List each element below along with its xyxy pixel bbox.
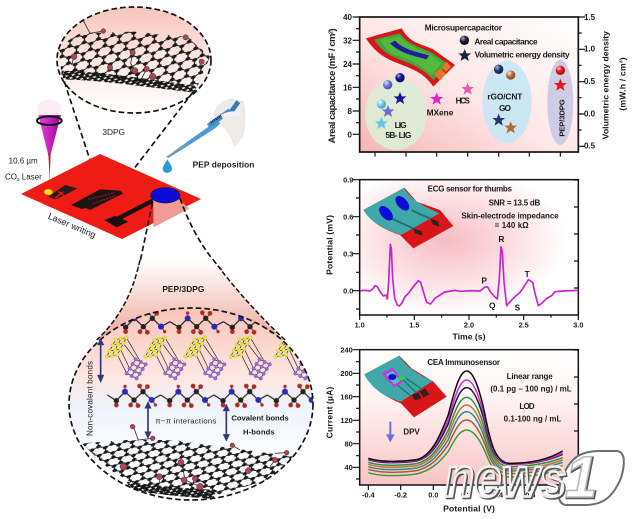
label: DPV: DPV bbox=[403, 427, 420, 436]
icon: PEP droplet bbox=[163, 159, 172, 173]
right axis numbers: 0.0 bbox=[584, 109, 596, 118]
chart: ECG sensor bbox=[325, 175, 583, 342]
left axis numbers: 24 bbox=[343, 60, 353, 69]
label: 10.6 um CO2 laser: Laser bbox=[20, 172, 42, 181]
right axis title: 3 bbox=[619, 60, 625, 63]
axis numbers: 0.6 bbox=[525, 491, 535, 500]
dashed zoom lines from electrode to bubble bbox=[64, 82, 193, 193]
material labels: HCS bbox=[456, 95, 470, 105]
y axis title: 2 bbox=[328, 31, 334, 34]
PQRST labels: R bbox=[498, 234, 504, 244]
logo oval bbox=[559, 451, 624, 505]
axis numbers: -0.4 bbox=[362, 491, 376, 500]
material labels: PEP/3DPG bbox=[557, 99, 566, 137]
ECG texts: Skin-electrode impedance bbox=[461, 211, 559, 220]
aromatic pi-stacks bbox=[105, 336, 316, 380]
label: 10.6 um CO2 laser: 2 bbox=[17, 177, 20, 182]
PEP chain top bbox=[117, 310, 277, 335]
PQRST labels: T bbox=[525, 269, 530, 279]
ECG waveform bbox=[360, 244, 578, 306]
zoom bubble: 3DPG graphene bbox=[57, 7, 211, 113]
right axis numbers: 1.5 bbox=[584, 13, 596, 22]
label: 10.6 um CO2 laser: 10.6 µm bbox=[9, 156, 38, 165]
label: 10.6 um CO2 laser bbox=[5, 156, 42, 182]
material labels: 5B- LIG bbox=[385, 130, 411, 140]
axis numbers: 2.5 bbox=[519, 321, 529, 330]
right axis numbers: 0.5 bbox=[584, 77, 596, 86]
molecular bubble bbox=[69, 308, 321, 500]
y axis title: ) bbox=[327, 28, 337, 31]
left axis numbers: 8 bbox=[348, 107, 353, 116]
ECG texts: SNR = 13.5 dB bbox=[489, 199, 541, 208]
funnel edges bbox=[97, 260, 285, 340]
CEA texts: 0.1-100 ng / mL bbox=[504, 415, 561, 424]
axis titles: Potential (mV) bbox=[325, 215, 335, 275]
axis numbers bbox=[340, 345, 568, 500]
icon: CO2 laser bbox=[37, 99, 62, 180]
frame and ticks bbox=[353, 17, 585, 157]
axis numbers: 0.2 bbox=[461, 491, 471, 500]
PQRST labels bbox=[481, 234, 530, 313]
left axis numbers: 40 bbox=[343, 13, 353, 22]
device icon bbox=[364, 356, 447, 417]
frame and ticks bbox=[353, 180, 578, 320]
dashed funnel upper part bbox=[138, 198, 222, 270]
label: pi-pi interactions: π−π interactions bbox=[155, 416, 217, 425]
label: PEP/3DPG: PEP/3DPG bbox=[162, 284, 204, 294]
frame and ticks bbox=[353, 350, 578, 490]
label: Non-covalent bonds: Non-covalent bonds bbox=[85, 361, 94, 436]
watermark: news1 logo bbox=[444, 445, 624, 511]
axis numbers: 0.8 bbox=[558, 491, 568, 500]
y axis title: Areal capacitance (mF / cm bbox=[327, 34, 337, 143]
word news: news bbox=[446, 447, 568, 510]
material labels: rGO/CNT bbox=[487, 91, 522, 101]
red substrate with printed electrodes bbox=[21, 154, 201, 239]
CEA texts: LOD bbox=[519, 402, 535, 411]
right axis title: ) bbox=[617, 57, 627, 60]
axis numbers: 2.0 bbox=[464, 321, 474, 330]
axis titles bbox=[325, 387, 495, 513]
PQRST labels: Q bbox=[489, 300, 496, 310]
left axis numbers: 16 bbox=[343, 83, 353, 92]
label: PEP deposition: PEP deposition bbox=[193, 160, 254, 170]
legend: Volumetric energy density bbox=[475, 49, 570, 59]
label: covalent bonds and H-bonds bbox=[231, 413, 289, 437]
panel: laser writing and 3DPG bbox=[5, 7, 254, 270]
axis numbers: 240 bbox=[340, 345, 353, 354]
axis numbers: 0.4 bbox=[493, 491, 504, 500]
plot background bbox=[360, 350, 578, 485]
axis numbers: 0.9 bbox=[343, 175, 353, 184]
label: 3DPG: 3DPG bbox=[102, 127, 125, 137]
label: covalent bonds and H-bonds: Covalent bonds bbox=[231, 413, 289, 422]
material labels: GO bbox=[499, 103, 512, 113]
material labels bbox=[385, 91, 566, 140]
material labels: MXene bbox=[427, 108, 454, 118]
PQRST labels: S bbox=[515, 303, 521, 313]
plot background bbox=[360, 180, 578, 315]
axis titles bbox=[325, 215, 486, 342]
axis numbers: 1.5 bbox=[409, 321, 419, 330]
ECG texts: ECG sensor for thumbs bbox=[428, 185, 513, 194]
material labels: LIG bbox=[395, 120, 407, 130]
axis numbers: 200 bbox=[340, 369, 353, 378]
device icon bbox=[366, 28, 455, 87]
axis titles: Potential (V) bbox=[443, 503, 495, 513]
CEA texts: CEA Immunosensor bbox=[427, 358, 500, 367]
axis numbers: 0.6 bbox=[343, 212, 353, 221]
axis numbers: 3.0 bbox=[573, 321, 583, 330]
legend: Areal capacitance bbox=[474, 37, 538, 47]
label: Laser writing: Laser writing bbox=[47, 211, 97, 240]
numeral 1: 1 bbox=[566, 446, 598, 511]
ECG sensor icon bbox=[363, 188, 453, 248]
panel: PEP/3DPG molecular zoom bbox=[69, 260, 321, 500]
left axis numbers: 0 bbox=[348, 130, 353, 139]
funnel background bbox=[97, 260, 283, 340]
right axis numbers: -0.5 bbox=[581, 142, 596, 151]
arrow: pi-pi bbox=[145, 401, 151, 439]
arrow: covalent bbox=[223, 404, 230, 441]
label: covalent bonds and H-bonds: H-bonds bbox=[243, 428, 275, 437]
ECG texts: = 140 kΩ bbox=[495, 221, 529, 230]
PEP chain middle bbox=[107, 383, 321, 408]
axis numbers: 40 bbox=[345, 463, 353, 472]
plot frame bbox=[360, 17, 578, 152]
right axis title bbox=[601, 31, 627, 139]
heading: Microsupercapacitor bbox=[425, 22, 503, 32]
CEA texts: Linear range bbox=[507, 372, 553, 381]
right axis numbers bbox=[581, 13, 596, 151]
right axis title: Volumetric energy density bbox=[601, 31, 611, 139]
axis titles: Current (µA) bbox=[325, 387, 335, 438]
legend bbox=[458, 36, 570, 61]
axis numbers: 0.0 bbox=[343, 286, 353, 295]
axis titles: Time (s) bbox=[452, 332, 486, 342]
left axis numbers bbox=[343, 13, 353, 139]
right axis numbers: 1.0 bbox=[584, 45, 596, 54]
ECG texts bbox=[428, 185, 559, 230]
data points bbox=[375, 65, 567, 133]
axis numbers: 160 bbox=[340, 392, 353, 401]
left axis numbers: 32 bbox=[343, 36, 353, 45]
PQRST labels: P bbox=[481, 276, 487, 286]
chart: CEA immunosensor bbox=[325, 345, 578, 513]
right axis title: (mW.h / cm bbox=[617, 63, 627, 111]
axis numbers: 0.0 bbox=[428, 491, 438, 500]
label: 10.6 um CO2 laser: CO bbox=[5, 172, 17, 181]
axis numbers: 1.0 bbox=[355, 321, 365, 330]
arrow: non-covalent bbox=[97, 338, 104, 383]
arrow: DPV bbox=[386, 422, 395, 442]
DPV curves bbox=[368, 371, 563, 477]
axis numbers: 120 bbox=[340, 416, 353, 425]
axis numbers: 0.3 bbox=[343, 249, 353, 258]
ellipses bbox=[365, 60, 573, 150]
word news: news bbox=[444, 446, 566, 508]
axis numbers: -0.2 bbox=[394, 491, 407, 500]
axis numbers: 80 bbox=[345, 439, 353, 448]
graphene sheet bottom bbox=[82, 424, 293, 499]
chart: microsupercapacitor bbox=[327, 13, 627, 157]
CEA texts: (0.1 pg – 100 ng) / mL bbox=[490, 385, 572, 394]
numeral 1: 1 bbox=[565, 445, 597, 510]
CEA texts bbox=[427, 358, 572, 424]
icon: pipette and hand bbox=[167, 99, 245, 158]
axis numbers bbox=[343, 175, 583, 330]
